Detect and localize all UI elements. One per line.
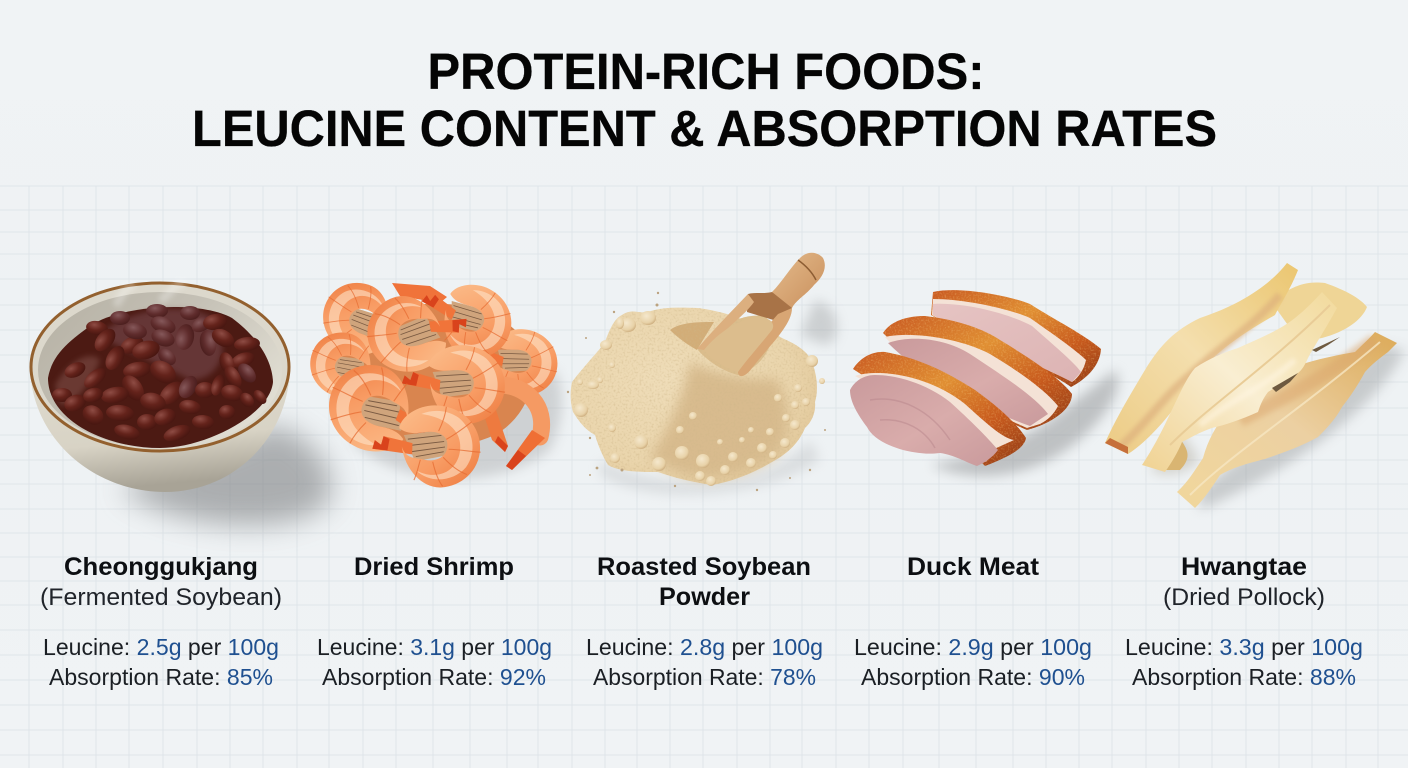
panel: dried shrimp bbox=[305, 272, 562, 690]
label: cheonggukjang: Absorption Rate: 85% bbox=[49, 664, 273, 690]
icon: dried pollock strips bbox=[1105, 263, 1405, 510]
label: hwangtae: (Dried Pollock) bbox=[1163, 584, 1325, 611]
label: dried shrimp: Leucine: 3.1g per 100g bbox=[317, 634, 552, 660]
title: LEUCINE CONTENT & ABSORPTION RATES bbox=[192, 100, 1217, 157]
label: dried shrimp bbox=[317, 553, 552, 690]
title: PROTEIN-RICH FOODS: bbox=[428, 43, 984, 100]
label: hwangtae: Leucine: 3.3g per 100g bbox=[1125, 634, 1363, 660]
label: duck meat bbox=[854, 553, 1092, 690]
label: cheonggukjang bbox=[40, 553, 282, 690]
label: roasted soybean powder: Leucine: 2.8g per 100g bbox=[586, 634, 823, 660]
label: hwangtae bbox=[1125, 553, 1363, 690]
label: roasted soybean powder: Roasted Soybean bbox=[597, 553, 811, 581]
label: hwangtae: Hwangtae bbox=[1181, 553, 1307, 581]
label: duck meat: Duck Meat bbox=[907, 553, 1040, 581]
icon: pile of dried shrimp bbox=[305, 272, 562, 496]
panel: duck meat bbox=[850, 290, 1118, 690]
label: cheonggukjang: Leucine: 2.5g per 100g bbox=[43, 634, 279, 660]
label: roasted soybean powder: Absorption Rate: 78% bbox=[593, 664, 816, 690]
panel: cheonggukjang bbox=[30, 283, 332, 690]
label: hwangtae: Absorption Rate: 88% bbox=[1132, 664, 1356, 690]
label: cheonggukjang: Cheonggukjang bbox=[64, 553, 258, 581]
icon: sliced duck meat bbox=[850, 290, 1118, 476]
label: roasted soybean powder: Powder bbox=[659, 583, 750, 611]
icon: bowl of fermented soybeans bbox=[30, 283, 332, 525]
panel: roasted soybean powder bbox=[567, 253, 837, 690]
label: duck meat: Absorption Rate: 90% bbox=[861, 664, 1085, 690]
icon: powder mound with wooden scoop bbox=[567, 253, 837, 494]
label: cheonggukjang: (Fermented Soybean) bbox=[40, 584, 282, 611]
label: dried shrimp: Absorption Rate: 92% bbox=[322, 664, 546, 690]
label: duck meat: Leucine: 2.9g per 100g bbox=[854, 634, 1092, 660]
title bbox=[192, 43, 1217, 157]
panel: hwangtae bbox=[1105, 263, 1405, 690]
label: roasted soybean powder bbox=[586, 553, 823, 690]
label: dried shrimp: Dried Shrimp bbox=[354, 553, 514, 581]
